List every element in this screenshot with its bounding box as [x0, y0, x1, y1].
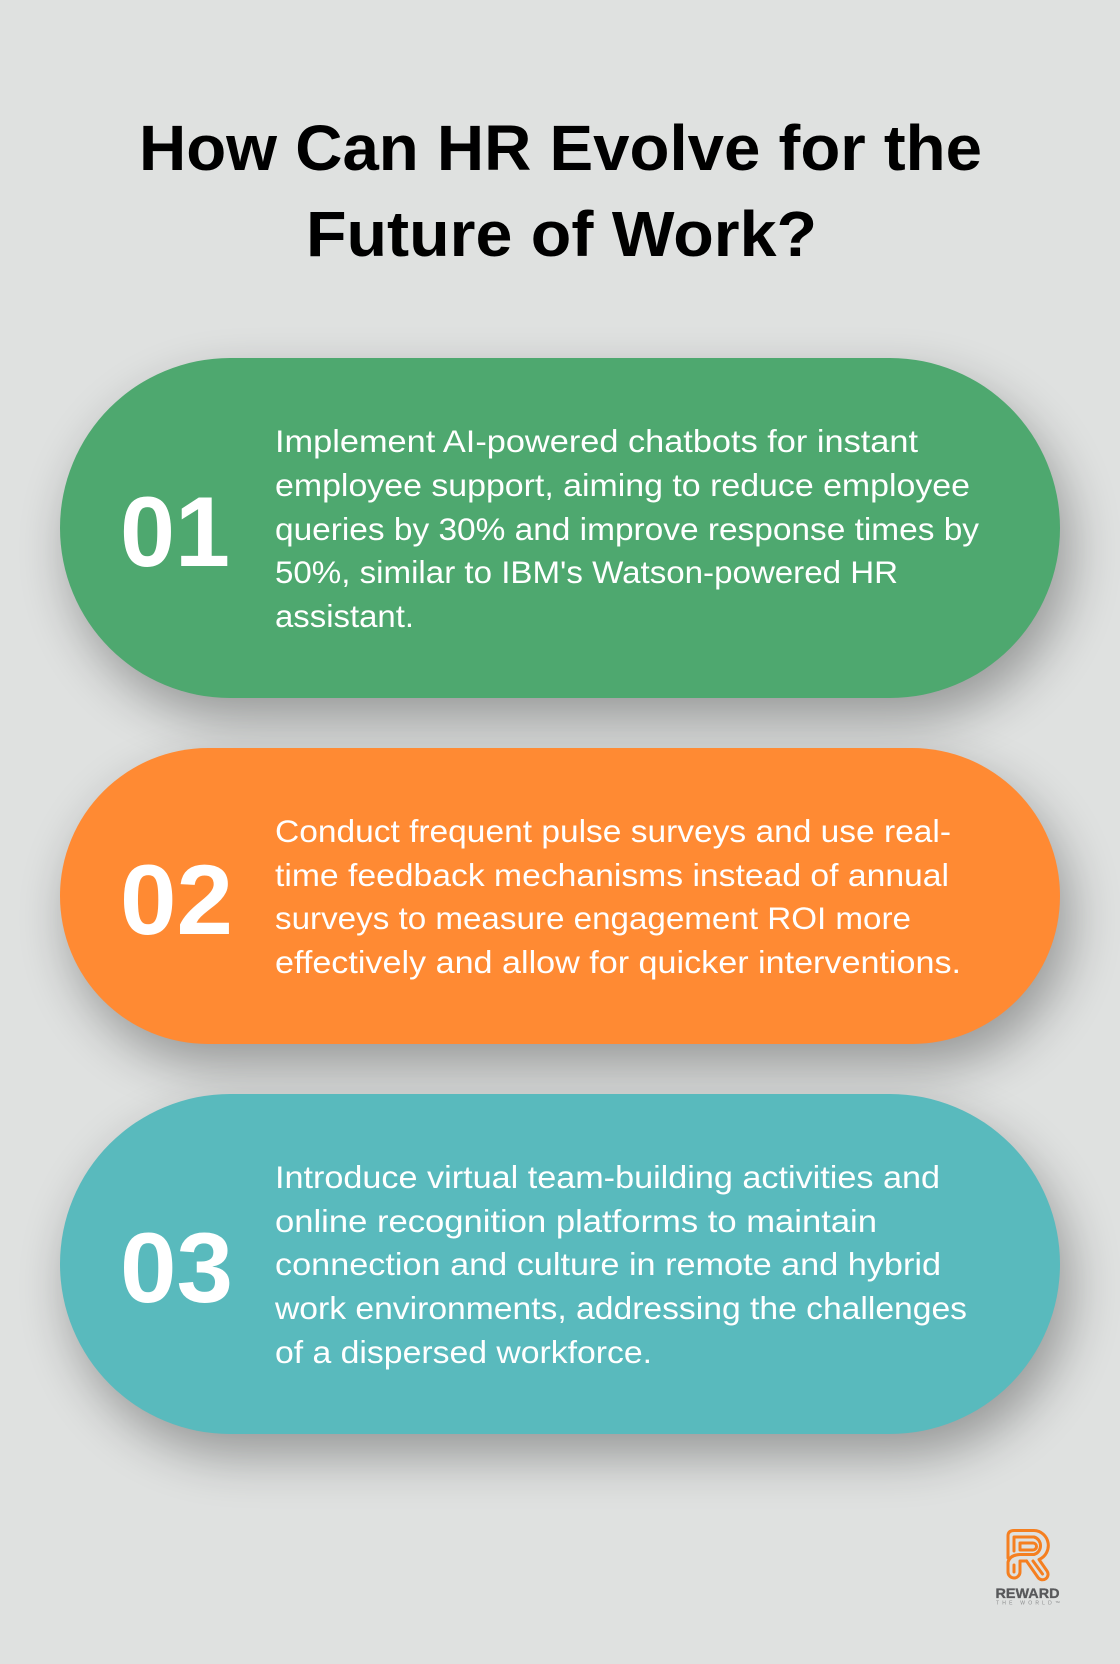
wordmark: REWARD [996, 1586, 1060, 1601]
step 01 description: employee support, aiming to reduce employee [275, 467, 970, 503]
step number 02: 02 [120, 844, 233, 955]
step 01 description: 50%, similar to IBM's Watson-powered HR [275, 554, 898, 590]
step 01 description: queries by 30% and improve response times by [275, 511, 979, 547]
step 02 description: time feedback mechanisms instead of annual [275, 857, 949, 893]
step 02 description: surveys to measure engagement ROI more [275, 900, 911, 936]
step number 01: 01 [120, 476, 230, 587]
panel: step 02 [60, 748, 1060, 1044]
step 03 description: connection and culture in remote and hybrid [275, 1246, 941, 1282]
step 01 description [275, 423, 979, 634]
title: How Can HR Evolve for the [139, 112, 982, 184]
step 03 description: online recognition platforms to maintain [275, 1203, 877, 1239]
step number 03: 03 [120, 1212, 233, 1323]
step 03 description [274, 1159, 967, 1370]
wordmark: THE WORLD™ [996, 1600, 1060, 1606]
title [139, 112, 982, 270]
panel: step 01 [60, 358, 1060, 698]
icon: orange R mark [1008, 1530, 1048, 1580]
step 01 description: assistant. [275, 598, 414, 634]
step 03 description: work environments, addressing the challenges [274, 1290, 967, 1326]
panel: step 03 [60, 1094, 1060, 1434]
step 02 description: effectively and allow for quicker interventions. [275, 944, 961, 980]
logo: Reward the World [996, 1529, 1060, 1606]
step 03 description: Introduce virtual team-building activities and [275, 1159, 940, 1195]
wordmark [996, 1586, 1060, 1606]
step 03 description: of a dispersed workforce. [275, 1334, 652, 1370]
title: Future of Work? [306, 198, 817, 270]
step 02 description [275, 813, 961, 980]
step 01 description: Implement AI-powered chatbots for instant [275, 423, 918, 459]
step 02 description: Conduct frequent pulse surveys and use real- [275, 813, 951, 849]
